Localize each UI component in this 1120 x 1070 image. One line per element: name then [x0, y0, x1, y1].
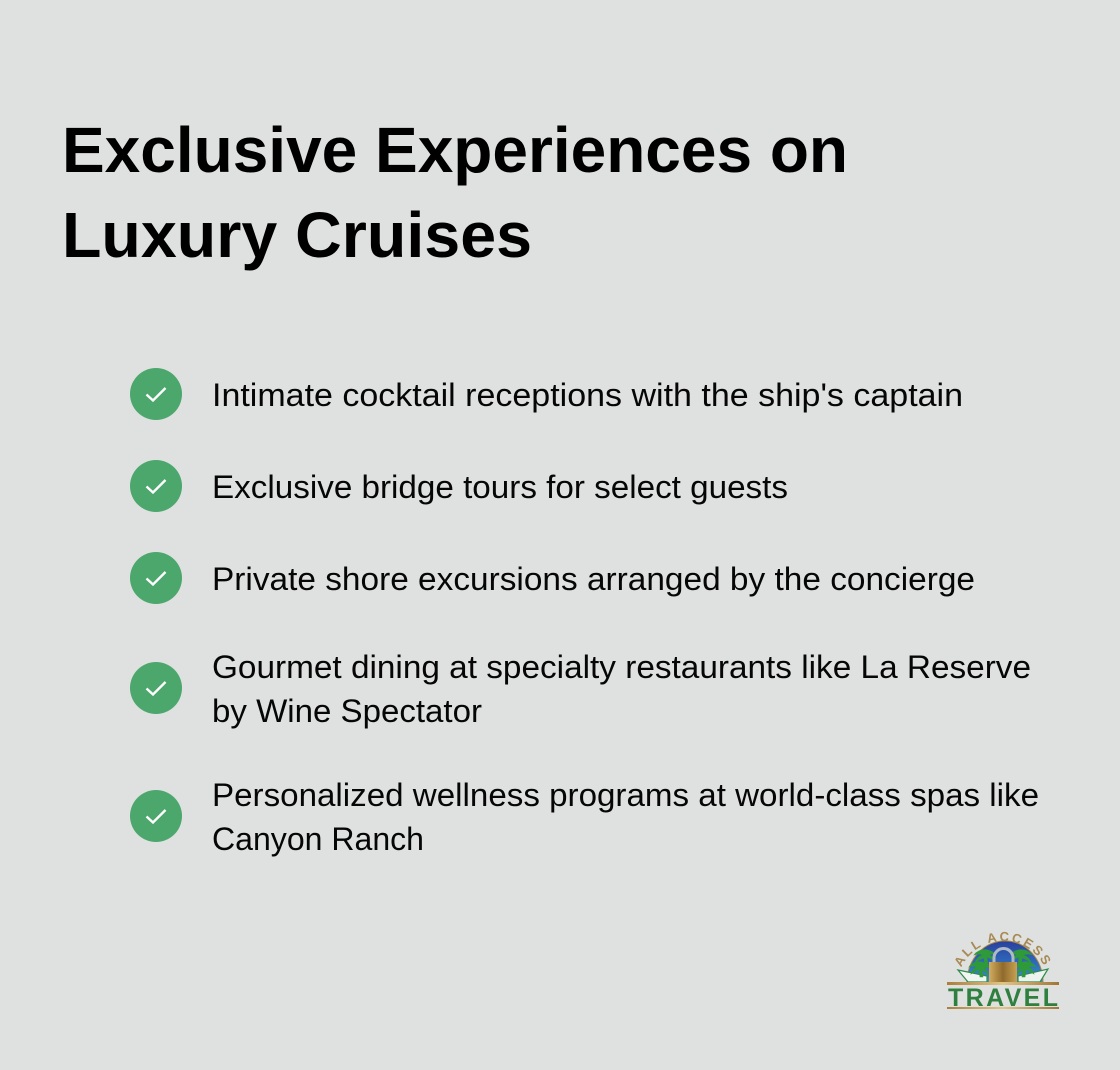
logo palms	[969, 950, 1036, 977]
logo padlock	[994, 949, 1013, 963]
title: Luxury Cruises	[62, 199, 532, 271]
list item 5: Canyon Ranch	[212, 821, 424, 857]
list item 5: Personalized wellness programs at world-class spas like	[212, 777, 1039, 813]
list item 1	[130, 368, 963, 420]
list item 3: Private shore excursions arranged by the concierge	[212, 561, 975, 597]
list item 4	[130, 649, 1031, 729]
list item 5	[130, 777, 1039, 857]
title	[62, 114, 848, 271]
list item 2	[130, 460, 788, 512]
list item 1: Intimate cocktail receptions with the ship's captain	[212, 377, 963, 413]
list item 4: Gourmet dining at specialty restaurants like La Reserve	[212, 649, 1031, 685]
logo boats	[958, 970, 987, 982]
list item 2: Exclusive bridge tours for select guests	[212, 469, 788, 505]
logo arc text: ALL ACCESS	[955, 932, 1050, 967]
logo dome	[967, 941, 1043, 982]
list item 3	[130, 552, 975, 604]
logo rules	[947, 982, 1059, 985]
logo: All Access Travel	[947, 932, 1059, 1012]
list item 4: by Wine Spectator	[212, 693, 482, 729]
logo wordmark: TRAVEL	[948, 984, 1058, 1012]
title: Exclusive Experiences on	[62, 114, 848, 186]
checklist	[130, 368, 1039, 857]
